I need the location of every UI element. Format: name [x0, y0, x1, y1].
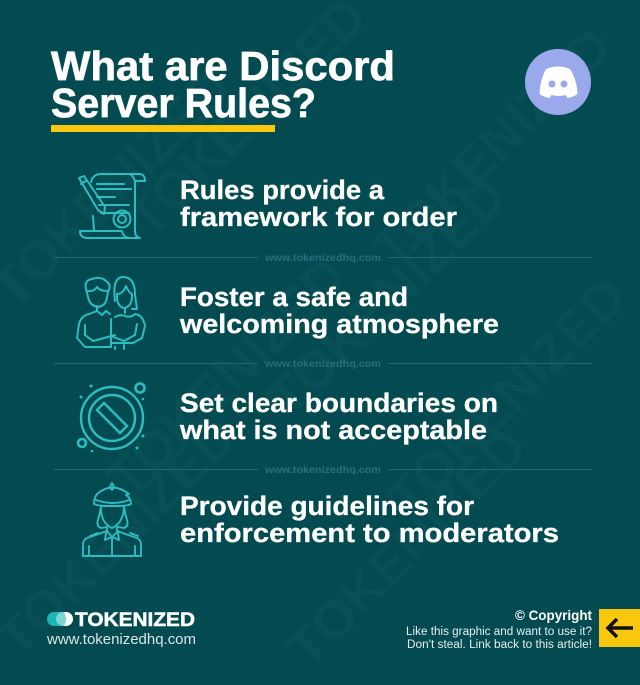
text: TOKENIZED	[361, 16, 623, 278]
text: TOKENIZED	[276, 416, 538, 678]
icon: tokenized logo	[47, 612, 73, 626]
icon: two people	[77, 277, 145, 349]
item 4: moderators	[83, 483, 559, 556]
divider 3: www.tokenizedhq.com	[264, 465, 381, 476]
item 4 text: Provide guidelines for	[180, 491, 475, 521]
item 2 text: welcoming atmosphere	[179, 309, 499, 339]
arrow badge	[599, 609, 640, 647]
icon: police officer	[83, 483, 141, 556]
text: TOKENIZED	[96, 246, 358, 508]
text: TOKENIZED	[376, 266, 638, 528]
icon: discord logo	[525, 49, 591, 115]
brand name: TOKENIZED	[75, 610, 195, 631]
title: Server Rules?	[51, 80, 316, 126]
footer brand	[46, 610, 196, 648]
item 2: safe atmosphere	[77, 277, 499, 349]
copyright notice: Like this graphic and want to use it?	[406, 626, 592, 638]
title: What are Discord	[51, 43, 395, 89]
copyright notice: © Copyright	[515, 608, 592, 623]
copyright notice: Don't steal. Link back to this article!	[407, 639, 592, 651]
item 3 text	[179, 388, 498, 445]
website: www.tokenizedhq.com	[46, 631, 196, 648]
icon: scroll with pen	[79, 174, 145, 238]
item 3 text: Set clear boundaries on	[180, 388, 498, 418]
item 1: rules framework	[79, 174, 458, 238]
item 4 text: enforcement to moderators	[180, 518, 559, 548]
icon: prohibition sign	[78, 384, 144, 452]
item 2 text: Foster a safe and	[180, 282, 408, 312]
item 1 text	[180, 175, 458, 232]
item 1 text: framework for order	[180, 202, 458, 232]
divider 2: www.tokenizedhq.com	[264, 359, 381, 370]
item 3 text: what is not acceptable	[179, 415, 487, 445]
item 1 text: Rules provide a	[180, 175, 385, 205]
item 2 text	[179, 282, 499, 339]
text: TOKENIZED	[256, 166, 518, 428]
item 3: boundaries	[78, 384, 498, 452]
item 4 text	[180, 491, 559, 548]
title	[51, 43, 395, 126]
divider 1: www.tokenizedhq.com	[264, 253, 381, 264]
title underline	[51, 125, 275, 132]
copyright notice	[406, 608, 592, 651]
